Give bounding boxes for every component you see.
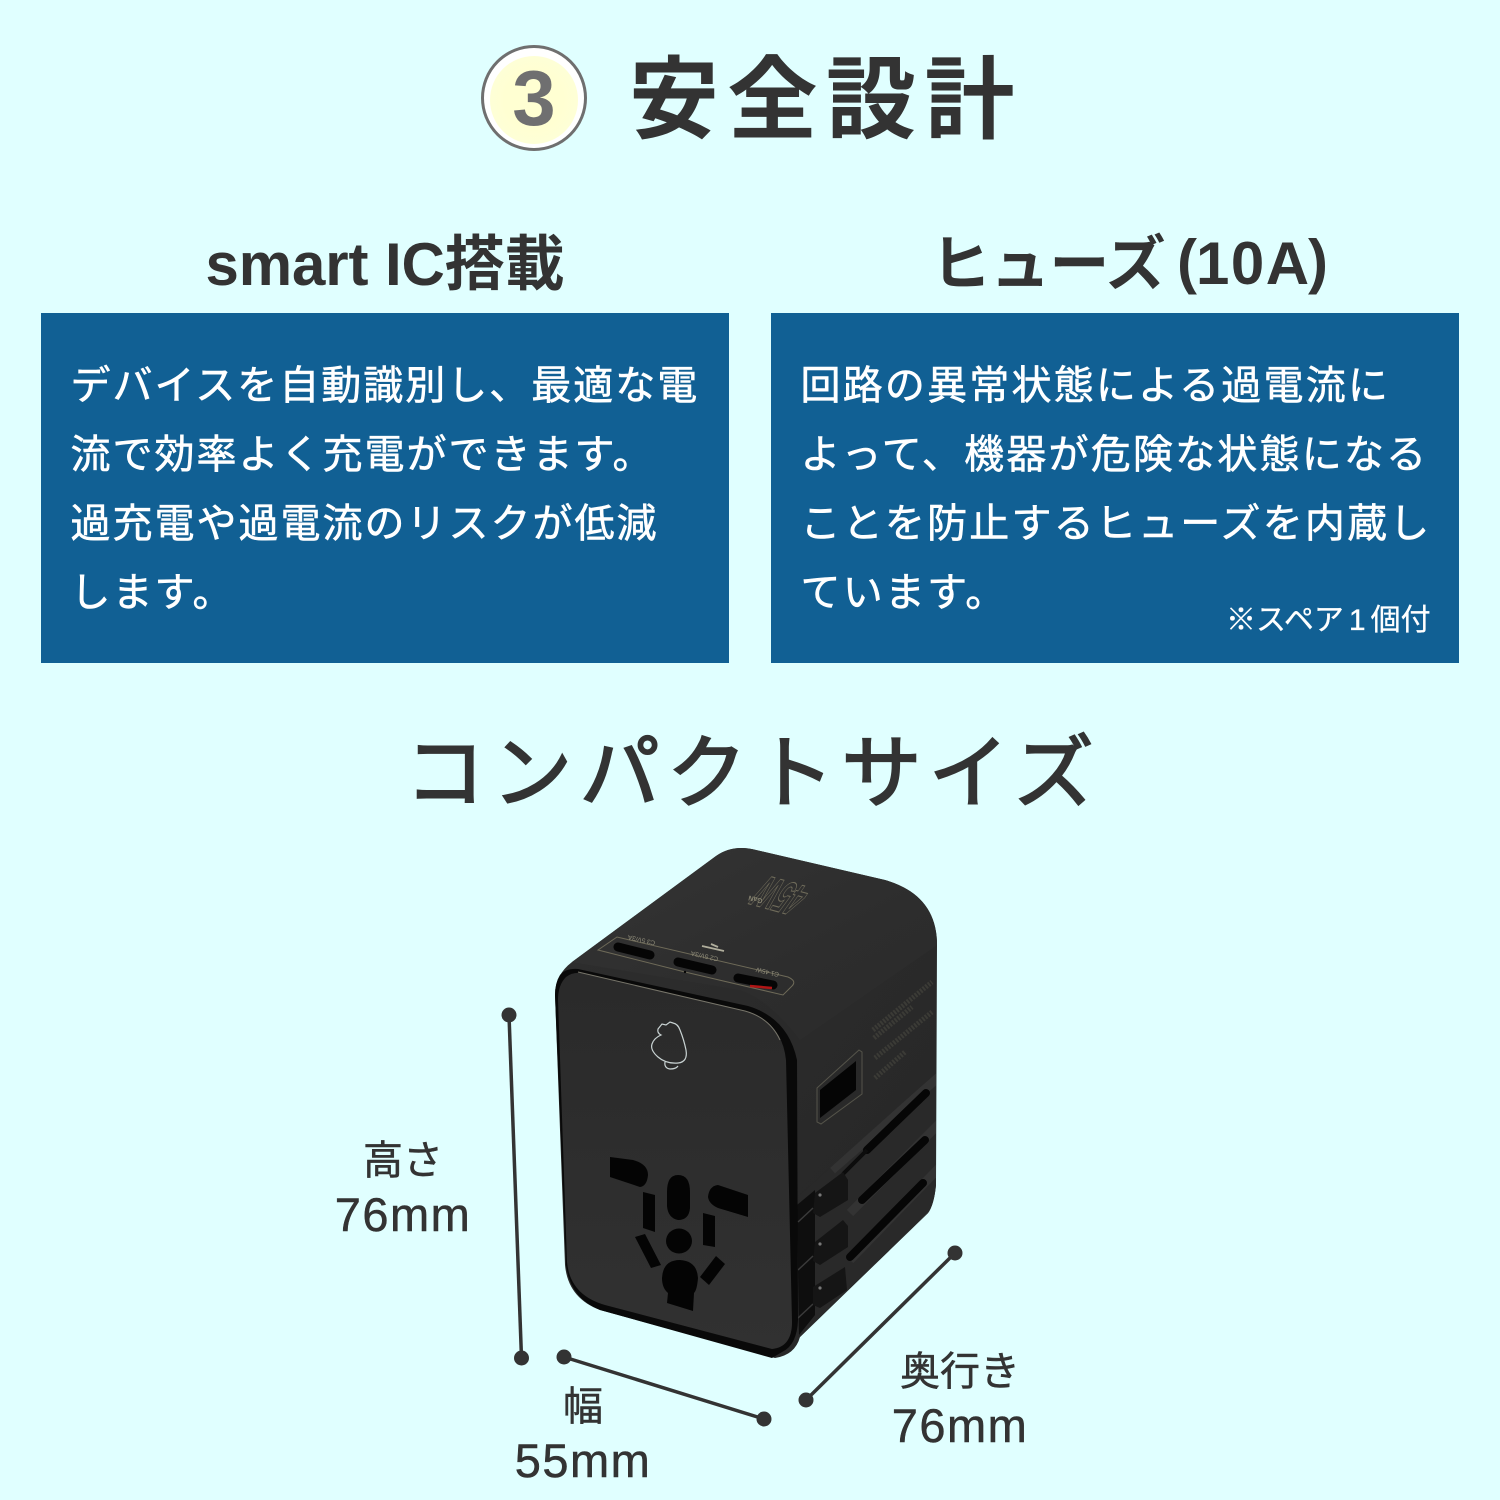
heading: fuse	[931, 228, 1327, 298]
panel: fuse description: ています。	[800, 571, 1008, 615]
panel: fuse description: ことを防止するヒューズを内蔵し	[800, 502, 1432, 546]
title: 安全設計	[629, 51, 1023, 151]
heading: fuse: ヒューズ	[931, 231, 1165, 298]
label: height 76mm: 高さ	[363, 1139, 443, 1183]
panel: fuse description: よって、機器が危険な状態になる	[800, 433, 1428, 477]
dimension line: width	[556, 1350, 772, 1426]
front face rim	[555, 969, 798, 1358]
panel: smart IC description	[41, 313, 729, 663]
side legal text	[873, 982, 932, 1078]
port labels: C2 5V/3A	[690, 949, 719, 962]
label: depth 76mm: 76mm	[892, 1399, 1028, 1452]
top face 45W GaN logo: GaN	[748, 894, 763, 904]
panel: fuse description: ※スペア1個付	[1226, 604, 1431, 637]
heading: compact size: コンパクトサイズ	[405, 729, 1101, 818]
label: height 76mm	[335, 1139, 471, 1241]
universal socket holes	[610, 1157, 748, 1311]
label: depth 76mm	[892, 1350, 1028, 1452]
label: width 55mm: 幅	[563, 1385, 603, 1429]
heading: smart IC: smart IC搭載	[205, 231, 565, 298]
top face	[572, 848, 937, 1040]
panel: smart IC description: 過充電や過電流のリスクが低減	[70, 502, 658, 546]
panel: fuse description: 回路の異常状態による過電流に	[800, 364, 1390, 408]
label: width 55mm: 55mm	[515, 1434, 651, 1487]
panel: smart IC description: デバイスを自動識別し、最適な電	[70, 364, 699, 408]
port labels: C1 45W	[755, 965, 780, 978]
number badge 3: 3	[512, 54, 556, 142]
panel: smart IC description: 流で効率よく充電ができます。	[70, 433, 654, 477]
label: height 76mm: 76mm	[335, 1188, 471, 1241]
panel: fuse description	[771, 313, 1459, 663]
label: width 55mm	[515, 1385, 651, 1487]
USB symbol	[702, 944, 724, 951]
blade strips	[830, 1074, 936, 1262]
port labels	[627, 933, 780, 978]
USB-C port strip	[598, 937, 794, 995]
front face	[558, 973, 792, 1349]
label: depth 76mm: 奥行き	[900, 1350, 1020, 1394]
dimension line: height	[502, 1008, 529, 1366]
hinge shadow	[797, 1190, 815, 1335]
heading: fuse: )	[1308, 228, 1327, 295]
mascot icon	[652, 1022, 686, 1069]
heading: fuse: 10A	[1196, 230, 1311, 297]
heading: fuse: (	[1177, 228, 1196, 295]
product: travel adapter	[555, 848, 937, 1358]
panel: smart IC description: します。	[70, 571, 234, 615]
side USB-A port	[820, 1061, 856, 1118]
side slider blade panel	[800, 1073, 936, 1337]
body silhouette	[555, 848, 937, 1358]
port labels: C3 5V/3A	[627, 933, 656, 946]
dimension line: depth	[798, 1246, 962, 1408]
number badge 3	[481, 45, 587, 151]
top face 45W GaN logo: 45W	[742, 866, 819, 924]
blade slots	[850, 1093, 926, 1257]
slider tabs	[813, 1172, 848, 1308]
